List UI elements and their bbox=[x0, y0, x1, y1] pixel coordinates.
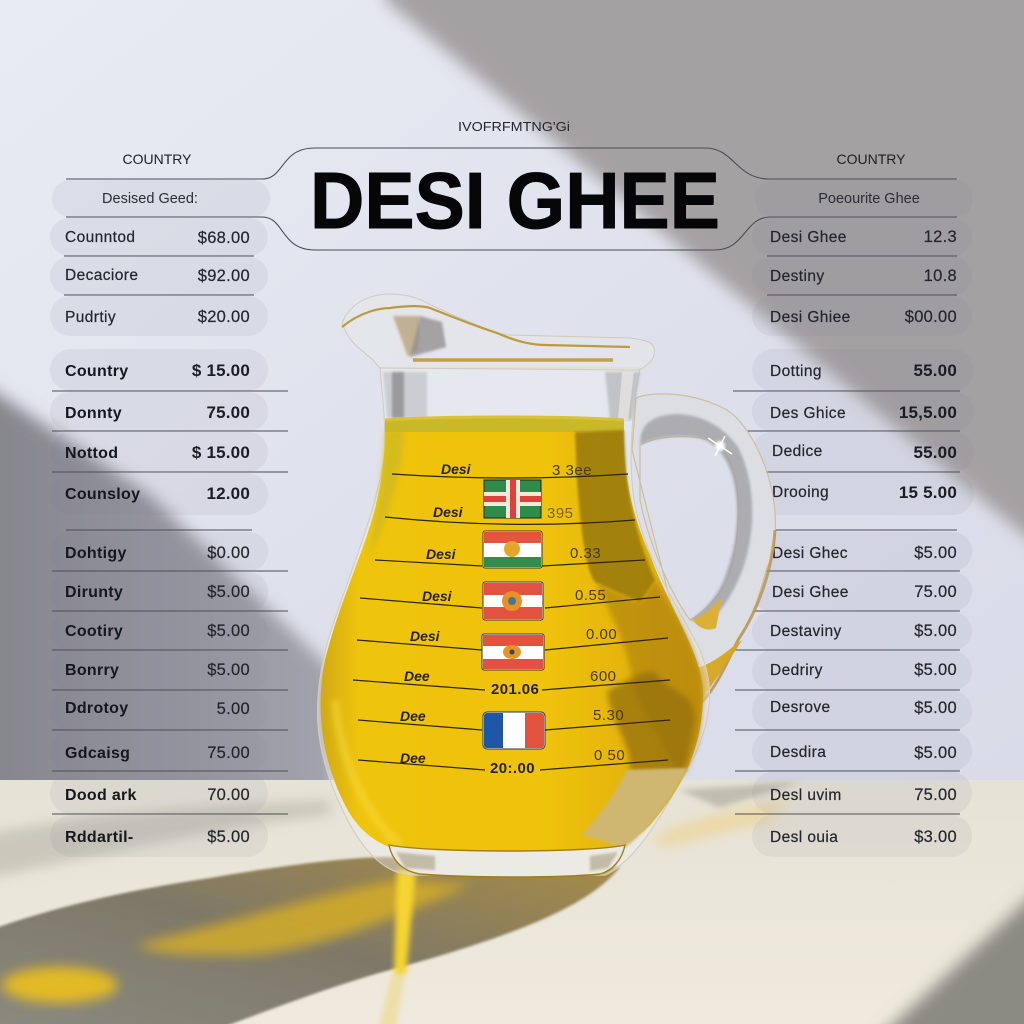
left row group 2: 75.00 bbox=[206, 403, 250, 422]
left row group 1: Decaciore bbox=[65, 267, 138, 284]
liquid shade lower bbox=[607, 672, 695, 772]
left table bbox=[50, 151, 288, 857]
liquid top tint bbox=[385, 418, 624, 432]
right row group 3: Desl uvim bbox=[770, 787, 842, 804]
right row group 2 bbox=[733, 349, 974, 530]
left row group 2: Country bbox=[65, 363, 128, 380]
right row group 3: Desdira bbox=[770, 744, 826, 761]
left row group 3: $5.00 bbox=[207, 661, 250, 679]
left row group 3: Dohtigy bbox=[65, 545, 127, 562]
jug labels: Desi bbox=[441, 461, 472, 477]
right row group 3: $5.00 bbox=[914, 544, 957, 562]
jug labels: Desi bbox=[410, 628, 441, 644]
right subheader bbox=[755, 180, 973, 217]
jug labels: 3 3ee bbox=[552, 462, 592, 479]
jug base glass bbox=[389, 845, 625, 877]
right row group 3: $5.00 bbox=[914, 661, 957, 679]
pale lower right glass bbox=[582, 768, 688, 848]
left row group 3: Cootiry bbox=[65, 623, 123, 640]
title: DESI GHEE bbox=[310, 156, 720, 245]
left row group 2: Donnty bbox=[65, 405, 122, 422]
flag 1 bbox=[484, 480, 541, 518]
right row group 3: Desi Ghee bbox=[772, 584, 849, 601]
right row group 3: Dedriry bbox=[770, 662, 823, 679]
right row group 2: 15 5.00 bbox=[899, 483, 957, 502]
right row group 1: Destiny bbox=[770, 268, 824, 285]
jug neck reflections bbox=[383, 372, 640, 420]
right row group 3: 75.00 bbox=[914, 583, 957, 601]
flag 2 bbox=[483, 531, 542, 568]
right row group 3 bbox=[735, 532, 972, 857]
jug labels: 0 50 bbox=[594, 747, 625, 764]
left row group 2: $ 15.00 bbox=[192, 443, 250, 462]
left subheader: Desised Geed: bbox=[102, 191, 198, 207]
wall shadow: lower left bbox=[0, 370, 335, 800]
right row group 1: Desi Ghiee bbox=[770, 309, 851, 326]
right row group 2: Des Ghice bbox=[770, 405, 846, 422]
liquid shade upper bbox=[575, 430, 655, 602]
left row group 3: 70.00 bbox=[207, 786, 250, 804]
left row group 1: $92.00 bbox=[198, 267, 250, 285]
wall shadow: upper right bbox=[385, 0, 1024, 568]
right header: COUNTRY bbox=[837, 151, 906, 167]
right row group 1: 12.3 bbox=[924, 228, 957, 246]
left header: COUNTRY bbox=[123, 151, 192, 167]
glass jug bbox=[318, 294, 775, 877]
right row group 2: 15,5.00 bbox=[899, 403, 957, 422]
right row group 3: 75.00 bbox=[914, 786, 957, 804]
right row group 2: 55.00 bbox=[913, 443, 957, 462]
title frame bbox=[66, 148, 957, 250]
flag 3 bbox=[483, 582, 543, 620]
jug labels: 0.55 bbox=[575, 587, 606, 604]
table soft shadows bbox=[0, 782, 800, 880]
measuring lines bbox=[353, 474, 670, 770]
jug labels: 395 bbox=[547, 505, 574, 522]
jug labels: Dee bbox=[400, 750, 426, 766]
left row group 3: $5.00 bbox=[207, 828, 250, 846]
jug handle bbox=[632, 394, 775, 702]
jug cast shadow on table bbox=[0, 857, 620, 1024]
jug labels: 600 bbox=[590, 668, 617, 685]
right row group 2: Dotting bbox=[770, 363, 822, 380]
jug labels: 201.06 bbox=[491, 681, 539, 698]
right row group 1: 10.8 bbox=[924, 267, 957, 285]
left row group 3: Dirunty bbox=[65, 584, 123, 601]
right table bbox=[733, 151, 974, 857]
table corner shadow bbox=[855, 870, 1024, 1024]
liquid left highlight bbox=[335, 700, 400, 845]
right row group 3: Desi Ghec bbox=[772, 545, 848, 562]
jug labels bbox=[400, 461, 625, 777]
right row group 2: 55.00 bbox=[913, 361, 957, 380]
right row group 3: Desl ouia bbox=[770, 829, 838, 846]
left row group 3: Dood ark bbox=[65, 787, 137, 804]
left subheader bbox=[52, 180, 270, 217]
liquid shade diagonal bbox=[595, 580, 703, 775]
right subheader: Poeourite Ghee bbox=[818, 191, 920, 207]
jug body glass bbox=[318, 368, 710, 875]
left row group 3: $0.00 bbox=[207, 544, 250, 562]
left row group 3 bbox=[50, 532, 288, 857]
left row group 3: Gdcaisg bbox=[65, 745, 130, 762]
right row group 1 bbox=[752, 218, 972, 336]
kicker text: IVOFRFMTNG'Gi bbox=[458, 119, 570, 134]
jug labels: Dee bbox=[404, 668, 430, 684]
right row group 3: Destaviny bbox=[770, 623, 842, 640]
right row group 3: $5.00 bbox=[914, 622, 957, 640]
left row group 2: $ 15.00 bbox=[192, 361, 250, 380]
left row group 3: 75.00 bbox=[207, 744, 250, 762]
background wall bbox=[0, 0, 1024, 790]
jug labels: Desi bbox=[422, 588, 453, 604]
left row group 3: Ddrotoy bbox=[65, 700, 128, 717]
left row group 3: Rddartil- bbox=[65, 829, 133, 846]
table top surface bbox=[0, 780, 1024, 1024]
right row group 1: Desi Ghee bbox=[770, 229, 847, 246]
jug labels: Desi bbox=[433, 504, 464, 520]
ghee liquid bbox=[321, 418, 703, 851]
liquid left olive strip bbox=[368, 430, 404, 560]
left row group 3: $5.00 bbox=[207, 583, 250, 601]
right row group 3: $3.00 bbox=[914, 828, 957, 846]
jug labels: 0.33 bbox=[570, 545, 601, 562]
flag 5 bbox=[483, 712, 545, 749]
jug labels: 5.30 bbox=[593, 707, 624, 724]
right row group 3: $5.00 bbox=[914, 744, 957, 762]
right row group 3: Desrove bbox=[770, 699, 831, 716]
right row group 3: $5.00 bbox=[914, 699, 957, 717]
left row group 2 bbox=[50, 349, 288, 530]
flag 4 bbox=[482, 634, 544, 670]
right row group 2: Drooing bbox=[772, 484, 829, 501]
right row group 2: Dedice bbox=[772, 443, 823, 460]
left row group 1 bbox=[50, 218, 268, 336]
jug labels: 20:.00 bbox=[490, 760, 535, 777]
left row group 2: Counsloy bbox=[65, 486, 140, 503]
left row group 2: 12.00 bbox=[206, 484, 250, 503]
jug labels: Desi bbox=[426, 546, 457, 562]
jug labels: Dee bbox=[400, 708, 426, 724]
liquid surface line bbox=[385, 417, 624, 420]
jug rim and spout bbox=[342, 294, 654, 370]
left row group 2: Nottod bbox=[65, 445, 118, 462]
left row group 1: $68.00 bbox=[198, 229, 250, 247]
left row group 3: 5.00 bbox=[217, 700, 250, 718]
left row group 1: Pudrtiy bbox=[65, 309, 116, 326]
left row group 1: $20.00 bbox=[198, 308, 250, 326]
right row group 1: $00.00 bbox=[905, 308, 957, 326]
left row group 1: Counntod bbox=[65, 229, 135, 246]
jug labels: 0.00 bbox=[586, 626, 617, 643]
left row group 3: $5.00 bbox=[207, 622, 250, 640]
left row group 3: Bonrry bbox=[65, 662, 119, 679]
